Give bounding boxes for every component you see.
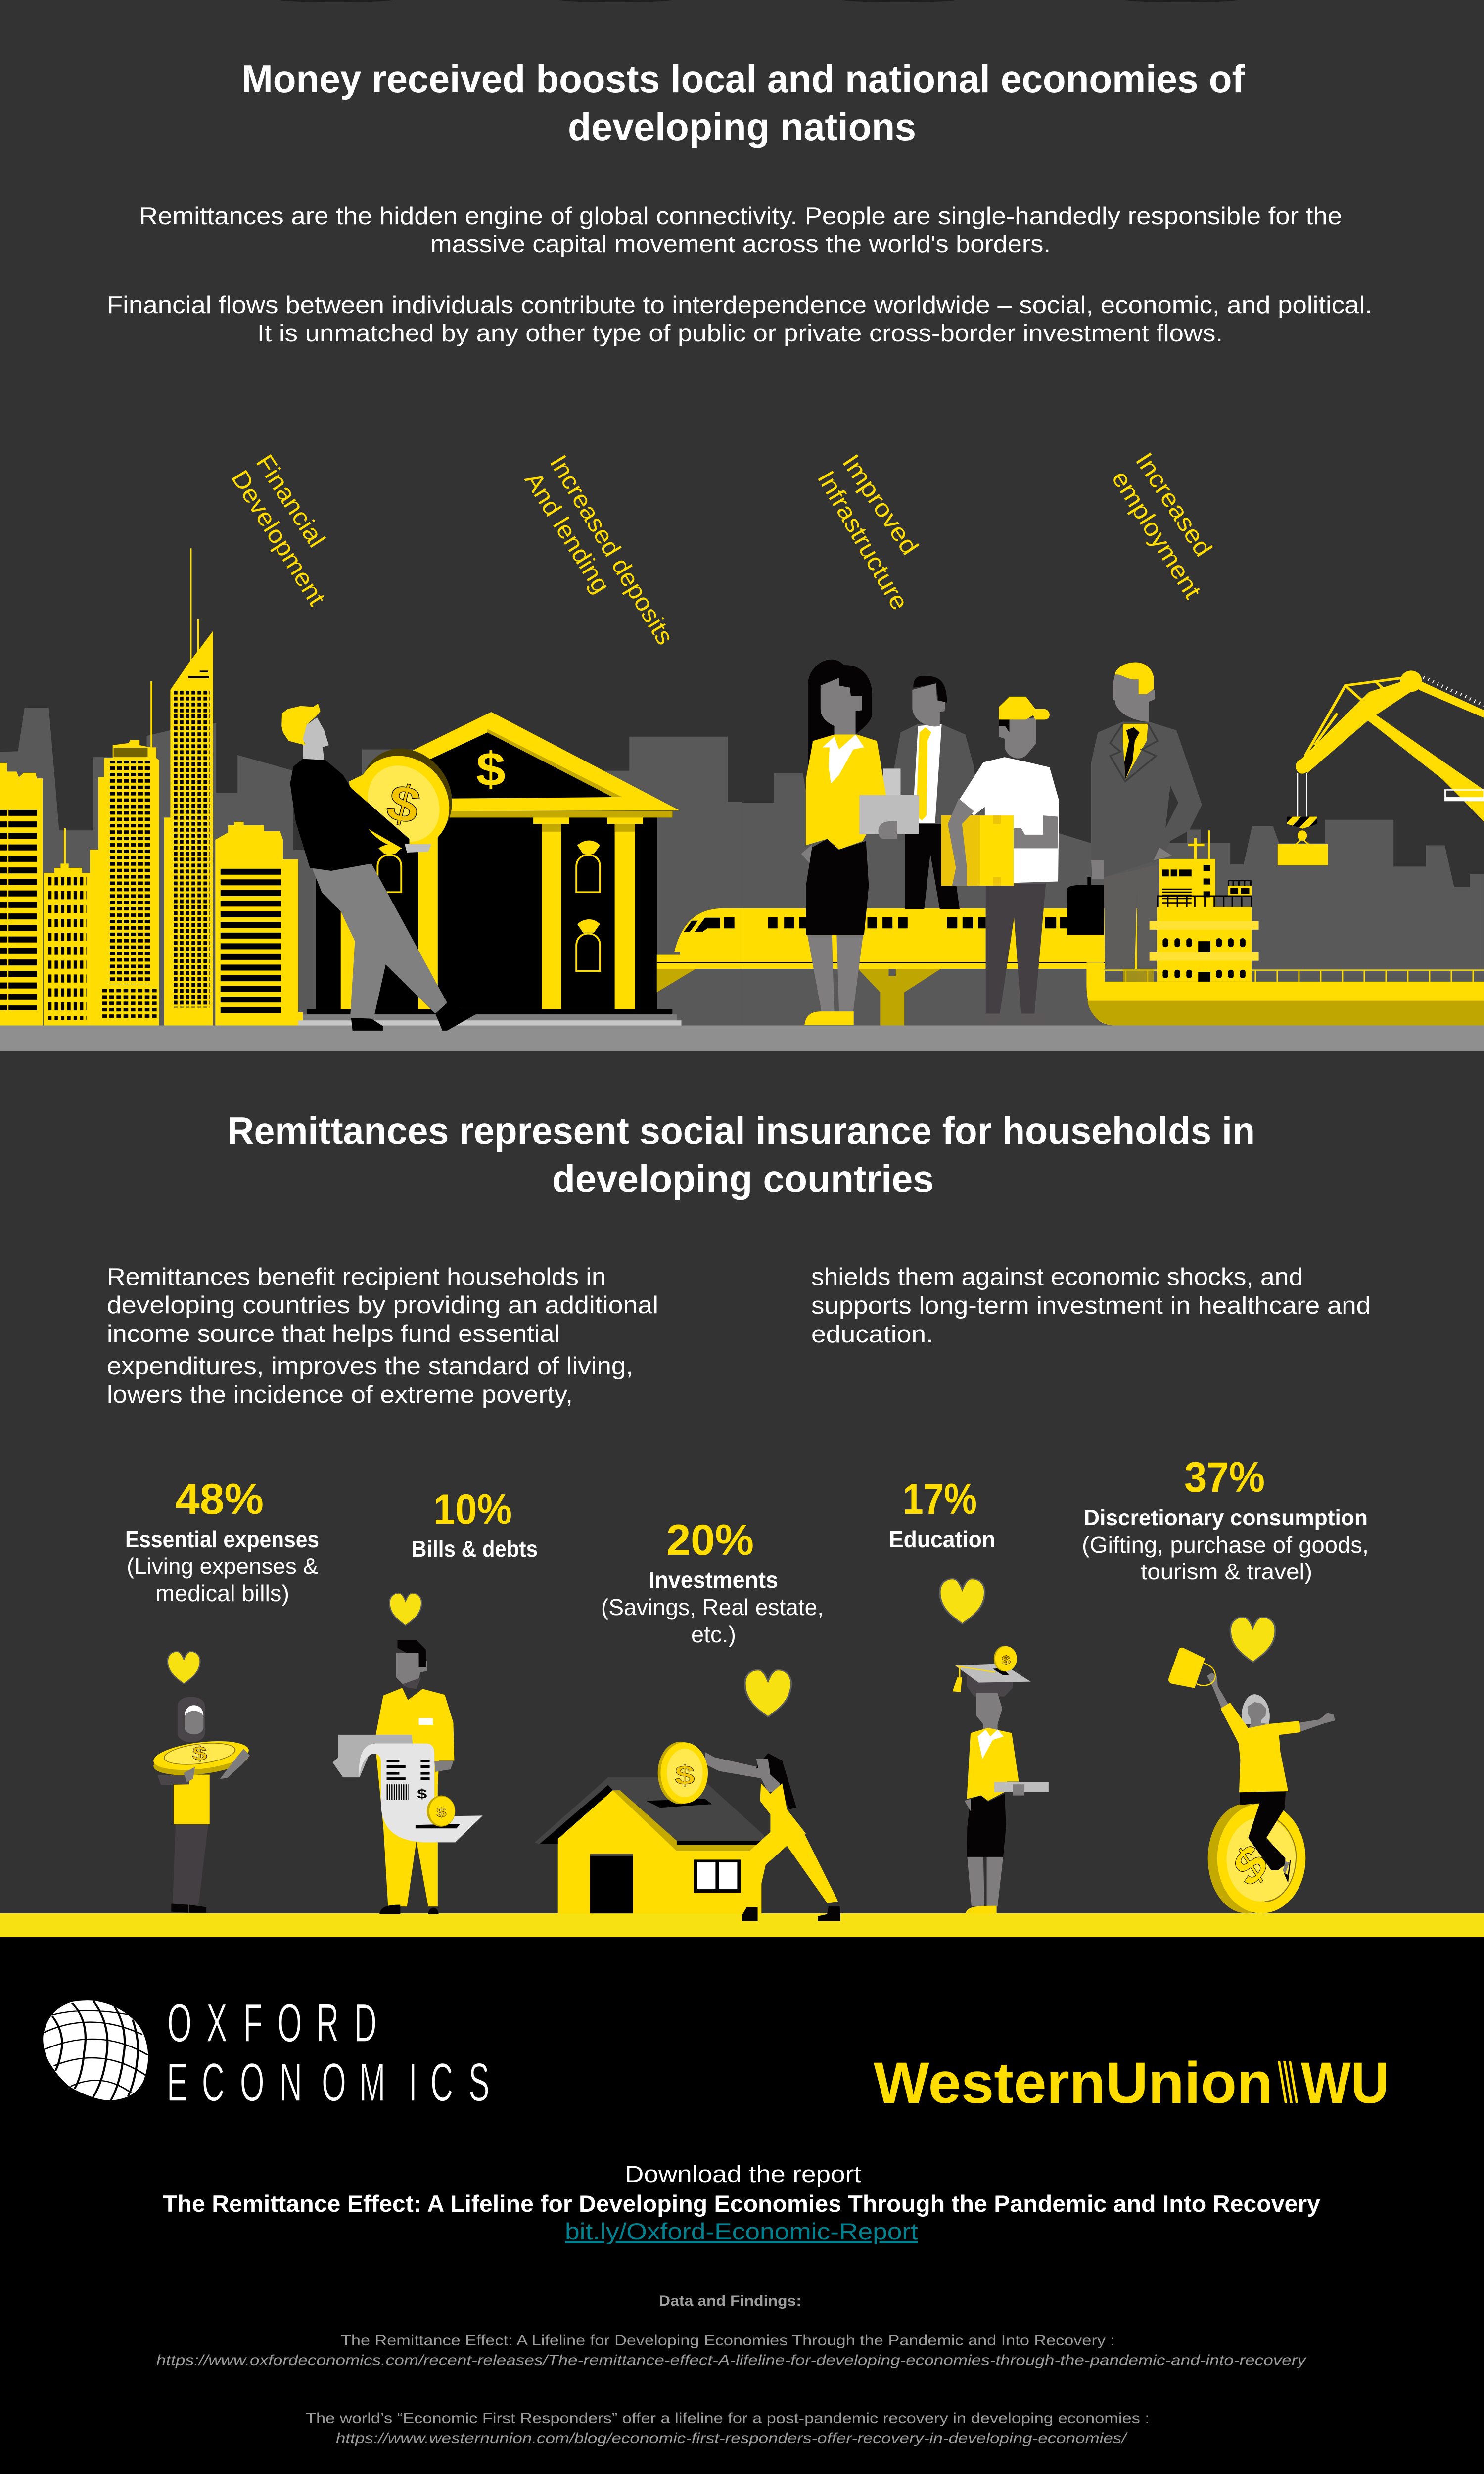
body text columns: income source that helps fund essential: [107, 1321, 560, 1347]
stat: 17% education: [889, 1475, 995, 1552]
woman on coin with bag: [1168, 1648, 1335, 1913]
big gold coin: $: [381, 773, 426, 835]
body text columns: education.: [811, 1321, 933, 1348]
heart 1: [168, 1652, 200, 1684]
rotated benefit labels: And lending: [519, 467, 615, 598]
stat: 10% bills and debts: [412, 1486, 538, 1562]
house: $: [675, 1760, 695, 1790]
yellow building 3: [90, 681, 159, 1026]
delivery man: [941, 697, 1059, 1024]
body text columns: [107, 1264, 1371, 1408]
stat: 20% investments: [601, 1517, 824, 1647]
graduate woman: [953, 1646, 1049, 1913]
download the report: The Remittance Effect: A Lifeline for Developing Economies Through the Pandemic and Into Recovery: [163, 2190, 1320, 2217]
house: [535, 1742, 776, 1914]
stat: 37% discretionary consumption: tourism & travel): [1141, 1559, 1312, 1584]
heading: social insurance: Remittances represent social insurance for households in: [227, 1109, 1255, 1152]
heart 3: [745, 1670, 791, 1717]
intro text: [107, 203, 1372, 347]
stat: 17% education: 17%: [903, 1475, 977, 1523]
woman with hijab holding coin: $: [192, 1742, 207, 1764]
data and findings: https://www.oxfordeconomics.com/recent-releases/The-remittance-effect-A-lifeline-for-developing-economies-through-the-pandemic-and-into-recovery: [156, 2352, 1307, 2369]
rotated benefit labels: Development: [226, 465, 331, 611]
rotated benefit labels: Improved: [837, 449, 924, 560]
man with receipt: $: [436, 1805, 447, 1820]
body text columns: supports long-term investment in healthcare and: [811, 1292, 1371, 1319]
man in grey suit: [1067, 662, 1202, 984]
stat: 37% discretionary consumption: [1082, 1454, 1369, 1584]
train body: [742, 908, 1154, 1026]
bank building: $: [476, 743, 506, 796]
heading: social insurance: [227, 1109, 1255, 1200]
rotated benefit labels: [226, 447, 1217, 649]
Oxford Economics logo: [43, 1993, 490, 2113]
stat: 48% essential expenses: Essential expenses: [125, 1526, 319, 1552]
Oxford Economics logo: ECONOMICS: [167, 2052, 490, 2113]
rotated benefit labels: employment: [1107, 466, 1206, 603]
man with receipt: $: [417, 1786, 427, 1801]
stat: 48% essential expenses: (Living expenses &: [127, 1553, 318, 1579]
rotated benefit labels: Infrastructure: [812, 466, 914, 615]
yellow floor strip: [0, 1913, 1484, 1937]
heading: social insurance: developing countries: [552, 1157, 934, 1200]
data and findings: https://www.westernunion.com/blog/economic-first-responders-offer-recovery-in-developing-economies/: [336, 2430, 1128, 2447]
big gold coin: [339, 736, 469, 862]
download the report: Download the report: [625, 2161, 861, 2187]
train nose: [657, 908, 742, 992]
yellow tower: [164, 548, 213, 1026]
stat: 48% essential expenses: 48%: [175, 1475, 264, 1523]
body text columns: shields them against economic shocks, and: [811, 1264, 1303, 1290]
stat: 20% investments: 20%: [666, 1517, 754, 1564]
woman on coin with bag: $: [1225, 1832, 1276, 1899]
data and findings: Data and Findings:: [659, 2293, 801, 2309]
bank building: [298, 712, 682, 1026]
stat: 48% essential expenses: [125, 1475, 319, 1606]
man with receipt: [332, 1640, 483, 1914]
body text columns: Remittances benefit recipient households in: [107, 1264, 606, 1290]
stat: 37% discretionary consumption: 37%: [1184, 1454, 1265, 1501]
heading: money received: [241, 57, 1245, 148]
Oxford Economics logo: OXFORD: [167, 1993, 377, 2053]
body text columns: lowers the incidence of extreme poverty,: [107, 1381, 573, 1408]
stat: 37% discretionary consumption: (Gifting, purchase of goods,: [1082, 1532, 1369, 1558]
data and findings: [156, 2293, 1307, 2447]
grey skyline left: [0, 708, 742, 1026]
heading: money received: Money received boosts local and national economies of: [241, 57, 1245, 100]
yellow building 5: [215, 822, 303, 1026]
woman pushing coin: [742, 1753, 840, 1921]
globe icon: [43, 2000, 148, 2100]
rotated benefit labels: Increased: [1130, 447, 1217, 562]
scene: people, train, ship and crane: [742, 660, 1484, 1026]
figures row left: [150, 1593, 776, 1914]
rotated benefit labels: Increased deposits: [545, 450, 679, 649]
grey skyline right: [742, 773, 1484, 1026]
intro text: Remittances are the hidden engine of global connectivity. People are single-handedly responsible for the: [139, 203, 1342, 230]
intro text: massive capital movement across the world's borders.: [430, 231, 1051, 258]
download the report: bit.ly/Oxford-Economic-Report: [565, 2218, 918, 2244]
intro text: It is unmatched by any other type of public or private cross-border investment flows.: [257, 320, 1223, 347]
heart 5: [1230, 1617, 1275, 1662]
cargo ship: [1086, 830, 1484, 1026]
body text columns: expenditures, improves the standard of living,: [107, 1353, 633, 1380]
heart 4: [940, 1579, 985, 1624]
figures row right: [742, 1579, 1275, 1921]
data and findings: The Remittance Effect: A Lifeline for Developing Economies Through the Pandemic and Into Recovery :: [341, 2332, 1115, 2349]
man carrying coin: [281, 704, 475, 1031]
stat: 17% education: Education: [889, 1526, 995, 1552]
top edge arcs: [279, 0, 1238, 2]
crane: [1278, 670, 1484, 865]
rotated benefit labels: Financial: [251, 449, 331, 552]
graduate woman: $: [1002, 1654, 1011, 1667]
download the report: [163, 2161, 1320, 2244]
stat: 20% investments: (Savings, Real estate,: [601, 1594, 824, 1620]
stat: 37% discretionary consumption: Discretionary consumption: [1084, 1505, 1368, 1530]
woman with hijab holding coin: [150, 1697, 252, 1913]
yellow building 2: [44, 828, 90, 1026]
intro text: Financial flows between individuals contribute to interdependence worldwide – social, economic, and political.: [107, 292, 1372, 319]
Western Union logo: WesternUnion: [874, 2050, 1273, 2116]
data and findings: The world’s “Economic First Responders” offer a lifeline for a post-pandemic recovery in developing economies :: [306, 2410, 1150, 2426]
heart 2: [389, 1593, 421, 1625]
ground band: [0, 1025, 1484, 1051]
stat: 20% investments: Investments: [649, 1567, 778, 1593]
scene: city and bank: [0, 548, 742, 1031]
stat: 48% essential expenses: medical bills): [155, 1580, 289, 1606]
stat: 10% bills and debts: 10%: [433, 1486, 512, 1533]
woman in yellow jacket: [801, 660, 919, 1025]
stat: 20% investments: etc.): [691, 1621, 736, 1647]
heading: money received: developing nations: [568, 105, 916, 148]
footer panel: [0, 1937, 1484, 2474]
Western Union logo: WU: [1301, 2050, 1389, 2116]
man in suit back: [894, 676, 981, 909]
yellow building 1: [0, 763, 43, 1026]
stat: 10% bills and debts: Bills & debts: [412, 1536, 538, 1562]
body text columns: developing countries by providing an additional: [107, 1292, 658, 1319]
